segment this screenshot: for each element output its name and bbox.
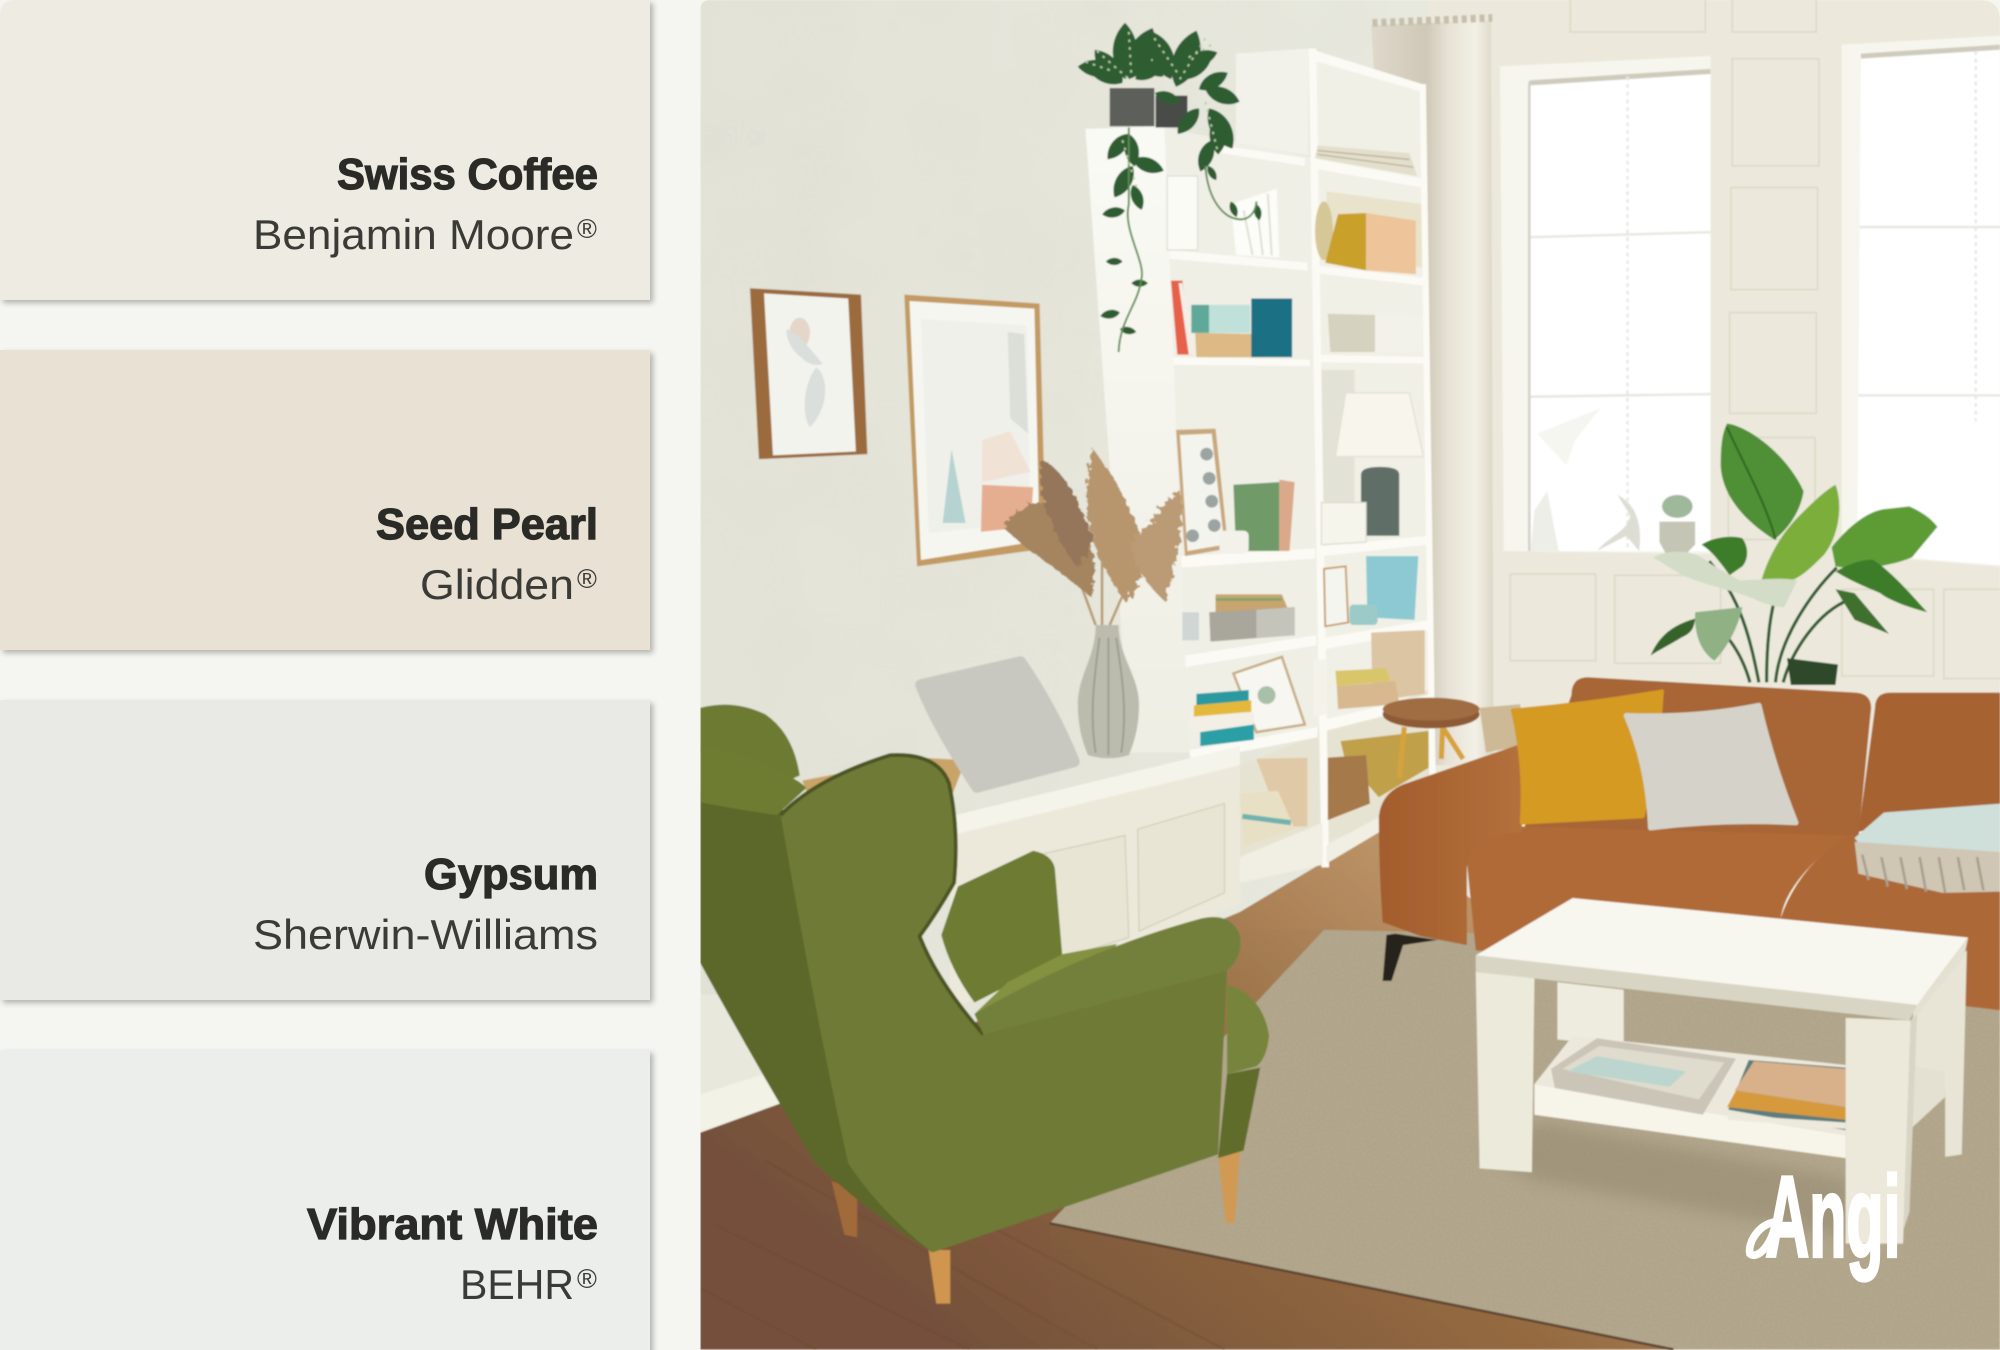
swatch name: Gypsum: Gypsum [424,850,598,899]
brand: BEHR: BEHR [460,1261,574,1308]
wicker basket [802,758,966,816]
photo: living room [700,0,2000,1349]
panel: Gypsum swatch [0,700,650,1000]
lower shelf [1534,1036,1846,1135]
sofa arm [1379,744,1522,945]
floor [700,832,1667,1350]
grey cushion [921,662,1074,787]
left side [700,791,932,1253]
lower wall panel [700,1074,780,1132]
stool [1383,698,1480,778]
swatch name: Seed Pearl: Seed Pearl [376,500,598,549]
trailing plants and pots on shelf [1077,23,1263,352]
chair seat [974,944,1117,1014]
bench cabinet [950,746,1240,1008]
framed print 2 [904,295,1046,566]
brand: Benjamin Moore: ® [577,214,597,244]
back legs [832,1181,857,1237]
swatch name: Swiss Coffee: Swiss Coffee [337,150,598,199]
throw blanket [1855,804,2000,893]
sofa seat [1467,827,1846,985]
table shadow on rug [1520,1124,1845,1234]
window 2 [1842,36,2000,566]
panel: Seed Pearl swatch [0,350,650,650]
floor plant [1651,423,1937,685]
sofa [1379,677,2000,1010]
mustard pillow [1513,691,1662,823]
pots [1110,88,1187,128]
right wall with panelling [1429,0,2000,816]
logo: Angi [1750,1153,1901,1281]
chair arm [974,917,1241,1034]
brand: Glidden: Glidden [420,561,574,608]
ribbed vase [1078,625,1139,758]
sofa leg [1383,934,1437,981]
rug [1050,930,2000,1349]
window 1 [1500,56,1710,554]
chair back [781,755,1227,1253]
shelf contents [1167,145,1429,847]
panel: Swiss Coffee swatch [0,0,650,300]
framed print 1 [750,288,867,459]
far wing [700,705,800,791]
pampas grass [1003,449,1182,625]
panel: Vibrant White swatch [0,1050,650,1350]
swatch name: Vibrant White: Vibrant White [307,1200,598,1249]
left wall [700,0,1472,1023]
chair inner back [941,851,1062,1003]
brand: Glidden: ® [577,564,597,594]
armchair [700,705,1269,1304]
bookshelves [1085,48,1436,883]
tray [1551,1038,1736,1115]
brand: BEHR: ® [577,1264,597,1294]
shelf boards [1170,48,1436,867]
side cushion [1227,985,1269,1074]
coffee table [1476,898,1968,1244]
brand: Sherwin-Williams: Sherwin-Williams [253,911,598,958]
table top [1476,898,1968,1005]
brand: Benjamin Moore: Benjamin Moore [253,211,574,258]
curtain [1371,18,1494,765]
basket by sofa [1480,704,1520,753]
front legs [1476,972,1534,1172]
sofa back [1522,677,1871,838]
foliage [1077,23,1263,335]
back legs [1557,982,1624,1046]
magazines [1727,1060,1846,1130]
white pillow [1626,705,1796,828]
